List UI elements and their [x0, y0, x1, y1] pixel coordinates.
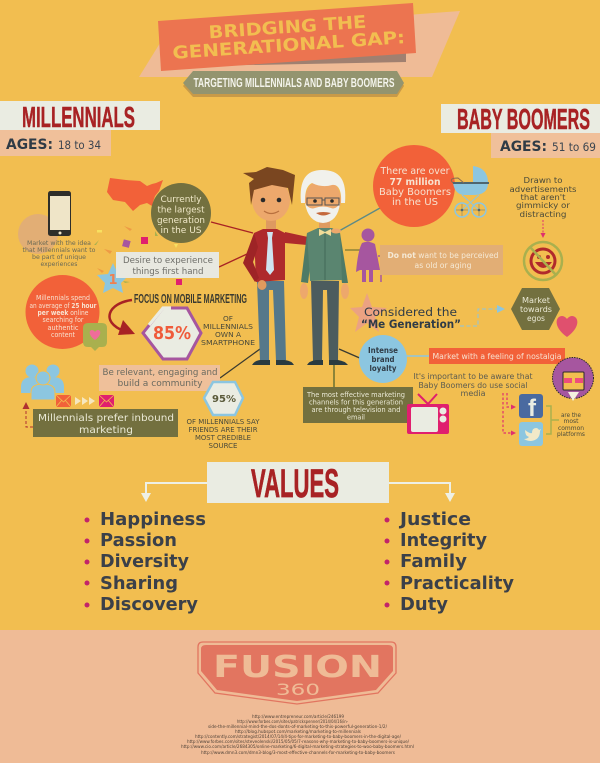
text: own a smartphone	[201, 315, 255, 347]
callout: 25 hours per week: an average of 25 hour	[30, 302, 97, 310]
callout: desire to experience: things first hand	[132, 266, 204, 276]
text: drawn to advertisements: gimmicky or	[516, 201, 571, 210]
heading: values: VALUES	[251, 462, 339, 506]
list: millennial values: Diversity	[100, 551, 189, 572]
callout: largest generation: Currently	[160, 194, 202, 204]
list: millennial values: Sharing	[100, 573, 178, 594]
list: baby boomer values: Duty	[400, 594, 448, 615]
text: unique experiences	[22, 240, 96, 268]
sources list: http://www.forbes.com/sites/steveolenski/2015/05/05/7-reasons-why-marketing-to-baby-boomers-is-unique/	[187, 739, 409, 745]
text: friends most credible: SOURCE	[208, 442, 238, 450]
callout: television and email	[303, 387, 413, 423]
callout: 77 million: 77 million	[390, 177, 440, 188]
connector lines to figures	[211, 208, 430, 388]
list: millennial values: Discovery	[100, 594, 198, 615]
callout: market towards egos: towards	[520, 305, 552, 314]
text: social media awareness	[414, 372, 532, 398]
list: baby boomer values: Practicality	[400, 573, 514, 594]
icon: twitter	[519, 422, 543, 446]
callout: do not want to be perceived: as old or aging	[414, 261, 472, 270]
callout: market towards egos: Market	[522, 296, 550, 305]
icon: heart	[557, 316, 577, 337]
callout: largest generation: in the US	[160, 225, 202, 235]
sources list: http://www.dmn3.com/dmn3-blog/3-most-effective-channels-for-marketing-to-baby-boomers	[201, 750, 396, 756]
callout: 77 million: There are over	[379, 166, 450, 177]
bracket with platform label	[546, 406, 585, 438]
icon: afro character	[552, 358, 594, 401]
callout: prefer inbound marketing: marketing	[79, 425, 133, 436]
sources list: http://www.forbes.com/sites/patrickspenner/2014/04/16/in-	[237, 719, 348, 725]
text: own a smartphone: MILLENNIALS	[203, 323, 253, 331]
callout: brand loyalty	[359, 335, 407, 383]
stat: 85 percent hexagon: 85%	[153, 324, 191, 344]
text: drawn to advertisements	[510, 176, 577, 219]
arrow: dashed pink down	[540, 220, 546, 238]
sources list: http://blog.hubspot.com/marketing/marketing-to-millennials	[235, 729, 362, 735]
callout: 25 hours per week: authentic	[48, 324, 79, 332]
stat: 95 percent hexagon	[204, 382, 243, 415]
ages: baby boomers: 51 to 69	[552, 140, 596, 154]
callout: me generation	[350, 293, 461, 332]
callout: do not want to be perceived: Do not want to be perceived	[388, 251, 499, 260]
sources list: http://www.cio.com/article/2684305/online-marketing/6-digital-marketing-strategies-to-woo-baby-boomers.html	[181, 744, 414, 750]
icon: stroller	[451, 166, 489, 217]
title banner: GENERATIONAL GAP:	[172, 28, 406, 64]
icon: no gimmicks smiley	[524, 242, 562, 280]
callout: brand loyalty: Intense	[368, 346, 398, 355]
footer band	[0, 630, 600, 763]
callout: brand loyalty: loyalty	[370, 364, 397, 373]
sources list	[181, 714, 414, 756]
sources list: http://www.entrepreneur.com/article/246199	[252, 714, 344, 720]
text: unique experiences: experiences	[40, 261, 78, 268]
bracket with platform label: are the	[561, 413, 581, 419]
logo: fusion 360: 360	[276, 680, 320, 699]
callout: 77 million: in the US	[392, 197, 438, 208]
callout: television and email: are through television and	[312, 406, 400, 414]
sources list: side-the-millennial-mind-the-dos-donts-of-marketing-to-this-powerful-generation-1/2/	[208, 724, 387, 730]
arrows: dashed pink to social icons	[503, 393, 516, 436]
callout: 25 hours per week: searching for	[42, 316, 84, 324]
callout: be relevant	[99, 365, 220, 391]
callout: do not want to be perceived	[380, 245, 503, 275]
icon: usa map	[107, 178, 163, 211]
list: millennial values: Happiness	[100, 509, 206, 530]
text: friends most credible: MOST CREDIBLE	[195, 434, 251, 442]
list: baby boomer values	[384, 509, 514, 615]
heading: values	[207, 462, 389, 506]
list: baby boomer values: Justice	[398, 509, 471, 530]
text: own a smartphone: SMARTPHONE	[201, 339, 255, 347]
arrow: curved red	[110, 300, 135, 335]
bracket with platform label: common	[558, 426, 584, 432]
arrow: dashed red up	[22, 402, 38, 427]
confetti with star badge	[94, 226, 182, 293]
stat: 95 percent hexagon: 95%	[212, 394, 236, 405]
callout: desire to experience: Desire to experience	[123, 255, 213, 265]
confetti with star badge: 1	[108, 273, 118, 288]
text: friends most credible	[186, 418, 260, 450]
callout: be relevant: build a community	[118, 378, 203, 388]
text: friends most credible: OF MILLENNIALS SAY	[186, 418, 260, 426]
list: baby boomer values: Family	[400, 551, 467, 572]
ages: millennials: 18 to 34	[58, 138, 101, 152]
sources list: http://contently.com/strategist/2014/07/14/4-tips-for-marketing-to-baby-boomers-in-the-digital-age/	[195, 734, 401, 740]
callout: prefer inbound marketing	[33, 409, 178, 437]
text: social media awareness: Baby Boomers do use social	[418, 381, 528, 390]
callout: largest generation: the largest	[158, 204, 205, 214]
stat: 85 percent hexagon	[143, 308, 201, 359]
text: drawn to advertisements: distracting	[520, 210, 567, 219]
logo: fusion 360	[198, 642, 396, 704]
text: unique experiences: be part of unique	[32, 254, 86, 261]
text: drawn to advertisements: Drawn to	[524, 176, 563, 185]
callout: market towards egos: egos	[527, 314, 545, 323]
bracket with platform label: platforms	[557, 432, 585, 438]
callout: brand loyalty: brand	[372, 355, 394, 364]
ages: millennials: AGES:	[6, 137, 53, 153]
callout: 25 hours per week: per week online	[38, 309, 88, 317]
text: own a smartphone: OWN A	[215, 331, 241, 339]
callout: desire to experience	[116, 252, 219, 278]
callout: be relevant: Be relevant, engaging and	[102, 367, 218, 377]
callout: 77 million	[373, 145, 455, 227]
heading: millennials	[0, 101, 160, 134]
ages: baby boomers	[491, 133, 600, 158]
arrow: dashed blue	[460, 305, 505, 326]
list: millennial values: Passion	[100, 530, 177, 551]
heading: focus on mobile marketing: FOCUS ON MOBILE MARKETING	[134, 291, 247, 306]
text: own a smartphone: OF	[223, 315, 233, 323]
heading: millennials: MILLENNIALS	[22, 102, 135, 134]
title banner	[139, 3, 460, 77]
arrow: values left	[141, 483, 207, 502]
arrow: values right	[389, 483, 455, 502]
callout: nostalgia: Market with a feeling of nostalgia	[432, 352, 562, 361]
callout: 77 million: Baby Boomers	[379, 187, 451, 198]
callout: largest generation	[151, 183, 211, 243]
list: millennial values	[84, 509, 206, 615]
text: social media awareness: It's important to be aware that	[414, 372, 532, 381]
icon: television	[407, 394, 449, 434]
callout: television and email: email	[347, 414, 365, 422]
callout: television and email: The most effective marketing	[306, 391, 405, 399]
icon: group of people	[21, 364, 64, 400]
icon: envelopes with arrows	[56, 395, 114, 407]
figure: older man	[300, 170, 349, 365]
subtitle ribbon	[183, 71, 404, 97]
bracket with platform label: most	[564, 419, 579, 425]
subtitle ribbon: TARGETING MILLENNIALS AND BABY BOOMERS	[194, 76, 394, 90]
icon: speech bubble with heart	[83, 323, 107, 351]
callout: prefer inbound marketing: Millennials prefer inbound	[38, 413, 174, 424]
list: baby boomer values: Integrity	[400, 530, 487, 551]
icon: facebook: f	[528, 395, 537, 422]
callout: market towards egos	[511, 288, 560, 330]
callout: me generation: “Me Generation”	[361, 317, 461, 331]
callout: me generation: Considered the	[364, 305, 457, 319]
ages: millennials	[0, 130, 111, 156]
ages: baby boomers: AGES:	[500, 139, 547, 155]
text: unique experiences: that Millennials want to	[22, 247, 96, 254]
callout: television and email: channels for this generation	[309, 398, 403, 406]
text: friends most credible: FRIENDS ARE THEIR	[188, 426, 258, 434]
icon: grandmother with cane	[356, 228, 381, 282]
text: drawn to advertisements: advertisements	[510, 185, 577, 194]
figure: young man	[243, 167, 308, 365]
icon: smartphone	[18, 191, 71, 254]
text: unique experiences: Market with the idea	[27, 240, 91, 247]
callout: 25 hours per week	[26, 275, 100, 349]
callout: largest generation: generation	[157, 215, 205, 225]
title banner: BRIDGING THE	[208, 13, 367, 43]
callout: nostalgia	[429, 348, 565, 364]
text: social media awareness: media	[460, 389, 486, 398]
logo: fusion 360: FUSION	[213, 650, 382, 685]
icon: facebook	[519, 394, 543, 422]
text: drawn to advertisements: that aren't	[520, 193, 566, 202]
callout: 25 hours per week: Millennials spend	[36, 294, 90, 302]
callout: 25 hours per week: content	[51, 331, 75, 339]
